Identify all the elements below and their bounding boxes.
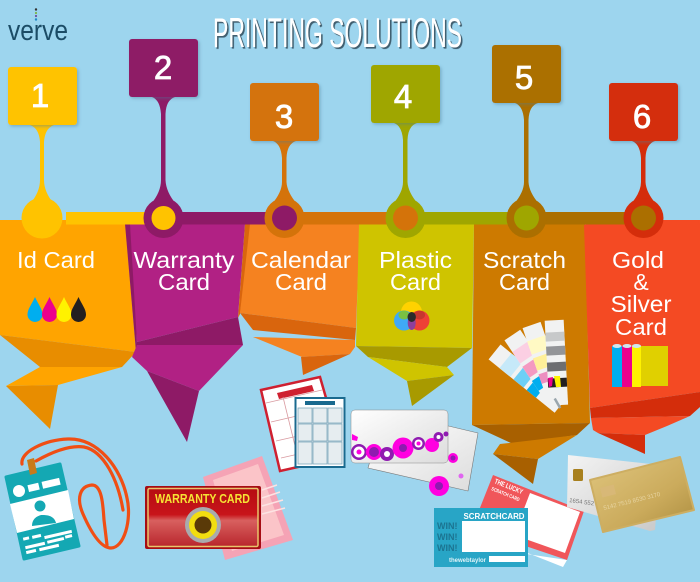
marker 6: [609, 83, 678, 238]
marker 2: [129, 39, 198, 238]
blue calendar: [296, 398, 344, 467]
win text: WIN!: [437, 521, 458, 531]
illustration: scratch cards: [434, 475, 584, 567]
label: plastic card second line: Card: [390, 269, 441, 295]
label: silver: Silver: [610, 291, 672, 317]
red calendar: [261, 377, 343, 471]
win text: WIN!: [437, 532, 458, 542]
scratchcard heading: SCRATCHCARD: [464, 512, 525, 521]
number 6: 6: [633, 98, 651, 135]
label: plastic card: Plastic: [379, 247, 452, 273]
number 2: 2: [154, 49, 172, 86]
icon: colour swatch fan: [489, 320, 568, 413]
panel: gold and silver card: [584, 220, 700, 454]
panel: id card: [0, 220, 136, 429]
brand text: thewebtaylor: [449, 558, 487, 564]
front card: [351, 410, 448, 463]
label: scratch card: Scratch: [483, 247, 566, 273]
panel: plastic card: [356, 224, 474, 406]
marker 1: [8, 67, 77, 238]
marker 5: [492, 45, 561, 238]
label: id card: Id Card: [17, 247, 95, 273]
number 3: 3: [275, 98, 293, 135]
icon: foil rolls: [612, 344, 668, 387]
blue scratch card: [434, 508, 528, 567]
number 4: 4: [394, 78, 412, 115]
clip: [27, 458, 37, 475]
label: calendar card: Calendar: [251, 247, 351, 273]
win text: WIN!: [437, 543, 458, 553]
title: PRINTING SOLUTIONS: [213, 9, 462, 56]
panel: scratch card: [472, 224, 590, 484]
number 5: 5: [515, 59, 533, 96]
icon: colour venn: [394, 302, 430, 330]
seal: [185, 507, 221, 543]
panel: calendar card: [238, 224, 360, 375]
illustration: id card with lanyard: [6, 439, 129, 559]
silver card: 1654 552: [569, 498, 595, 508]
back card: [368, 424, 478, 496]
illustration: gold and silver cards: [567, 455, 694, 532]
gold card: 5142 7519 8530 3170: [603, 492, 662, 512]
red card: [145, 486, 261, 549]
red scratch card: [472, 475, 584, 567]
lucky text: THE LUCKY: [493, 478, 524, 496]
scratch card text: SCRATCH CARD: [490, 486, 521, 503]
warranty card text: WARRANTY CARD: [155, 491, 250, 506]
number 1: 1: [31, 77, 49, 114]
badge: [6, 464, 79, 559]
marker 4: [371, 65, 440, 238]
label: warranty card: Warranty: [134, 247, 235, 273]
pink card behind: [203, 456, 293, 560]
illustration: calendars: [261, 377, 344, 471]
panel: warranty card: [125, 224, 245, 442]
timeline connector: [66, 212, 643, 224]
label: card: Card: [615, 314, 667, 340]
illustration: warranty card: [145, 456, 293, 560]
icon: ink drops: [28, 297, 86, 322]
lanyard: [22, 439, 129, 548]
logo: verve: verve: [8, 15, 68, 47]
label: scratch card second line: Card: [499, 269, 550, 295]
label: warranty card second line: Card: [158, 269, 210, 295]
illustration: plastic cards: [351, 410, 478, 496]
marker 3: [250, 83, 319, 238]
label: calendar card second line: Card: [275, 269, 327, 295]
phone box: [489, 556, 525, 562]
label: ampersand: &: [633, 269, 649, 295]
label: gold: Gold: [612, 247, 664, 273]
